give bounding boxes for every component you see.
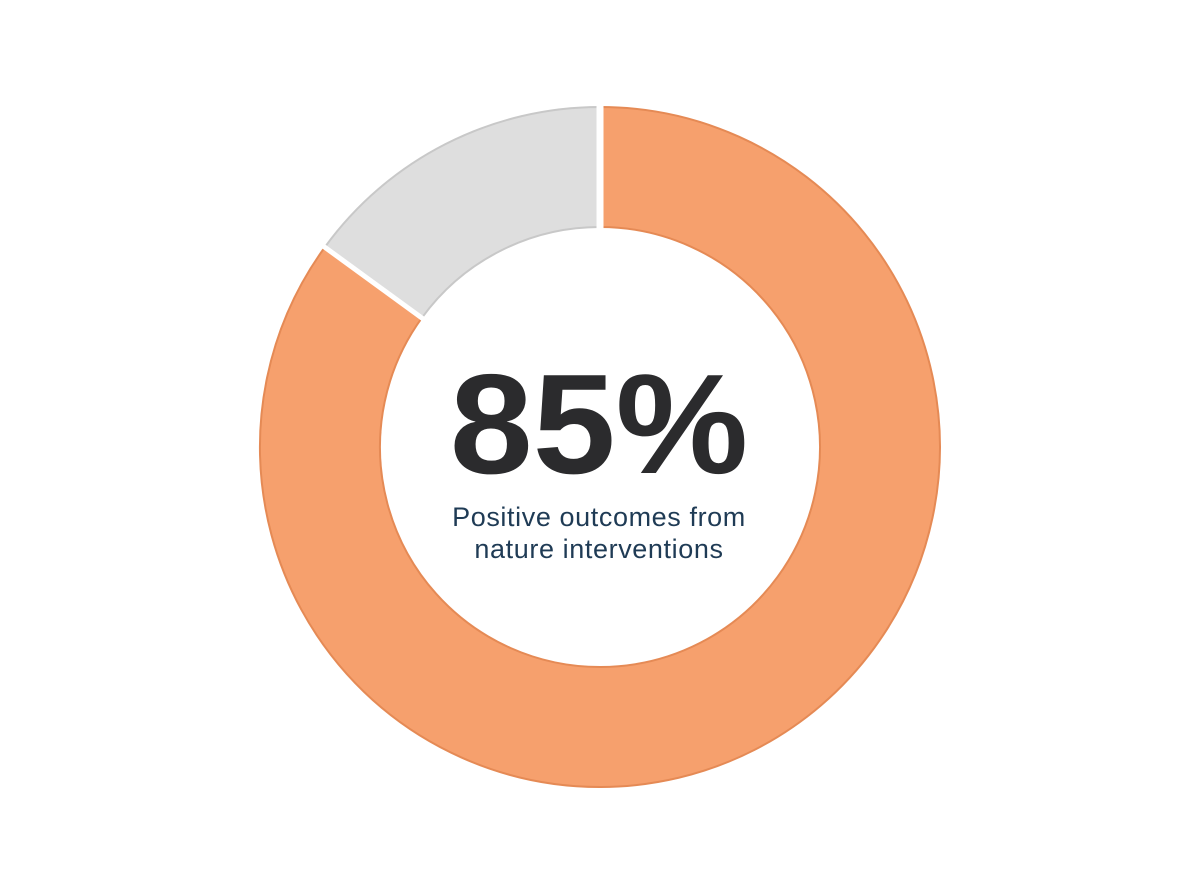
segment: positive 85% — [260, 107, 940, 787]
center label: Positive outcomes from — [452, 502, 746, 532]
center label — [452, 502, 746, 564]
center value: 85% — [450, 344, 748, 503]
segment: remaining 15% — [325, 107, 600, 318]
center label: nature interventions — [474, 534, 724, 564]
